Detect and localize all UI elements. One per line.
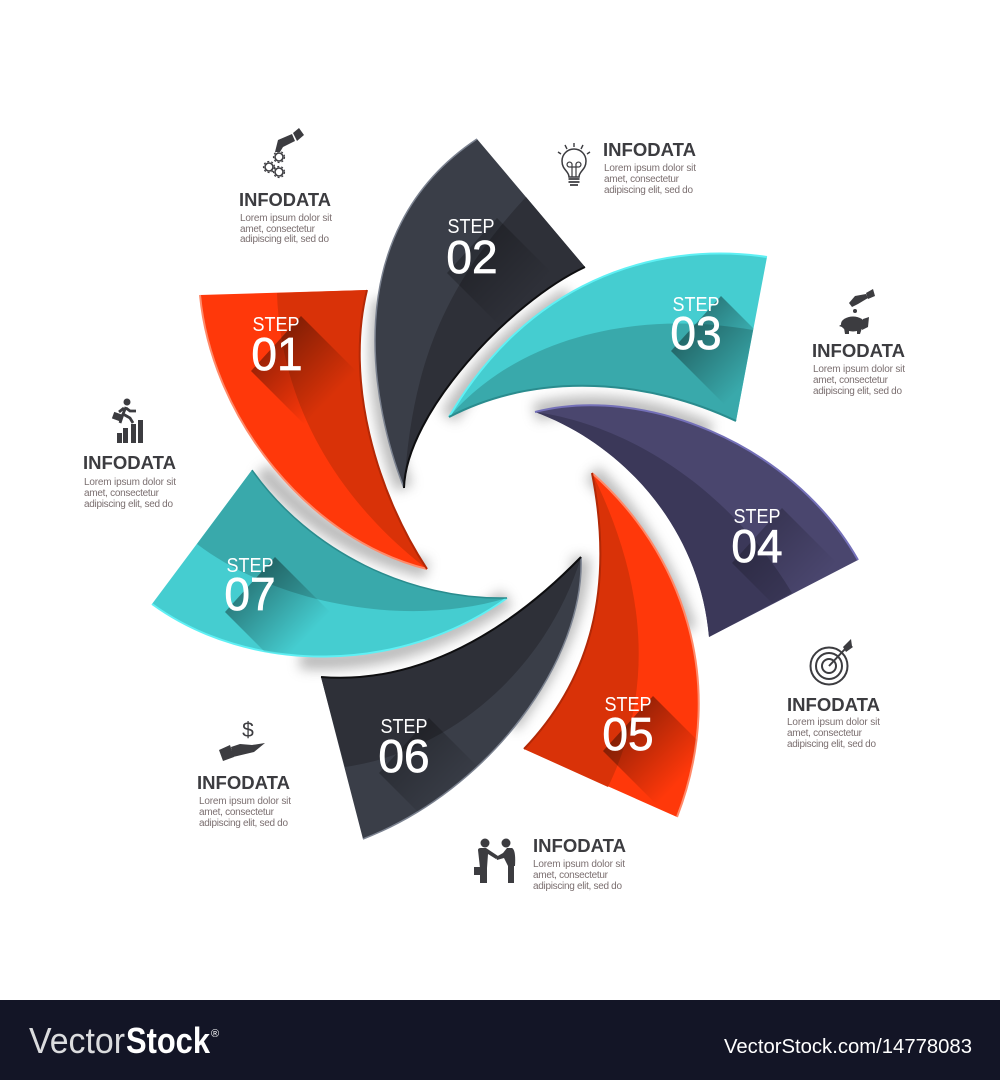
text block: infodata lower right: amet, consectetur [787,728,863,739]
petal: step 06 [321,557,581,843]
petal: step 03 [449,254,791,421]
text block: infodata left: adipiscing elit, sed do [84,499,173,510]
text block: infodata top left [239,190,332,245]
label: step 05: 05 [602,708,654,760]
label: step 07: 07 [224,568,276,620]
text block: infodata bottom: INFODATA [533,836,626,856]
label: step 04: STEP [734,506,780,528]
text block: infodata right: amet, consectetur [813,375,889,386]
label: step 02: 02 [446,231,498,283]
label: step 06: 06 [378,730,430,782]
text block: infodata left: amet, consectetur [84,488,160,499]
icon: target with arrow [810,639,853,684]
text block: infodata right [812,341,905,397]
text block: infodata lower left: amet, consectetur [199,807,275,818]
petal: step 04 [535,405,858,637]
footer bar [0,1000,1000,1080]
text block: infodata top left: amet, consectetur [240,224,316,235]
text block: infodata left: Lorem ipsum dolor sit [84,477,176,488]
text block: infodata bottom: adipiscing elit, sed do [533,881,622,892]
text block: infodata left [83,453,176,510]
text block: infodata lower right [787,695,880,750]
petal: step 07 [152,470,508,658]
text block: infodata right: Lorem ipsum dolor sit [813,364,905,375]
label: step 03: 03 [670,307,722,359]
label: step 05: STEP [604,694,652,716]
text block: infodata top left: Lorem ipsum dolor sit [240,213,332,224]
text block: infodata lower left: adipiscing elit, sed do [199,818,288,829]
text block: infodata lower right: adipiscing elit, sed do [787,739,876,750]
text block: infodata lower right: INFODATA [787,695,880,715]
label: step 01: 01 [251,328,303,380]
text block: infodata top right: amet, consectetur [604,174,680,185]
icon: light bulb [558,143,590,185]
text block: infodata top left: adipiscing elit, sed do [240,234,329,245]
footer logo: Vector [29,1020,125,1061]
petal: step 01 [200,290,427,569]
icon: piggy bank and coin [839,289,875,334]
text block: infodata top right: Lorem ipsum dolor sit [604,163,696,174]
text block: infodata bottom [533,836,626,892]
text block: infodata lower left [197,773,291,829]
petal: step 05 [523,472,700,818]
petal: step 02 [375,139,585,488]
text block: infodata lower left: INFODATA [197,773,290,793]
icon: hand holding dollar [219,719,265,761]
label: step 01: STEP [252,314,300,336]
label: step 06: STEP [380,716,428,738]
icon: handshake [474,838,515,883]
text block: infodata top right [603,140,696,196]
label: step 07: STEP [226,555,274,577]
label: step 03: STEP [672,294,720,316]
text block: infodata top left: INFODATA [239,190,331,210]
text block: infodata bottom: Lorem ipsum dolor sit [533,859,625,870]
label: step 04: 04 [731,520,783,572]
label: step 02: STEP [448,216,494,238]
text block: infodata bottom: amet, consectetur [533,870,609,881]
icon: hand with gears [264,128,304,178]
icon: hand holding dollar: $ [242,719,254,742]
text block: infodata left: INFODATA [83,453,176,473]
footer logo: Stock [126,1020,211,1061]
footer logo: ® [211,1028,219,1040]
icon: runner on rising bars [112,398,143,443]
text block: infodata lower left: Lorem ipsum dolor sit [199,796,291,807]
text block: infodata right: INFODATA [812,341,905,361]
footer logo [29,1020,219,1061]
text block: infodata top right: adipiscing elit, sed do [604,185,693,196]
text block: infodata lower right: Lorem ipsum dolor sit [787,717,880,728]
text block: infodata right: adipiscing elit, sed do [813,386,902,397]
footer url: VectorStock.com/14778083 [724,1036,972,1058]
text block: infodata top right: INFODATA [603,140,696,160]
